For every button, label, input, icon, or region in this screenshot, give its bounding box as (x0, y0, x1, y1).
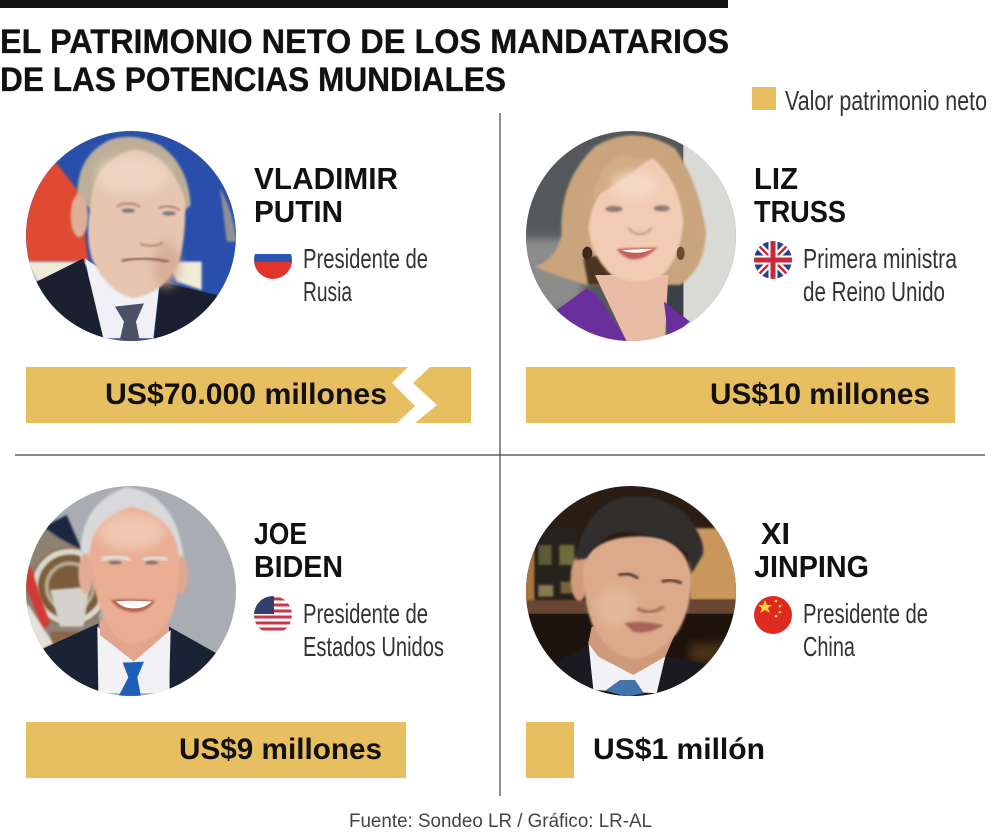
title: EL PATRIMONIO NETO DE LOS MANDATARIOS (0, 23, 729, 61)
portrait: Xi (526, 486, 736, 696)
name (254, 516, 343, 584)
name: LIZ (754, 161, 798, 196)
panel: Joe Biden (20, 480, 444, 778)
name: TRUSS (754, 194, 846, 229)
value bar: US$9 millones (179, 733, 382, 766)
portrait: Biden (26, 486, 236, 696)
name: PUTIN (254, 194, 343, 229)
role: Rusia (303, 276, 352, 307)
value bar: US$70.000 millones (105, 378, 387, 411)
name (754, 161, 846, 229)
role: Presidente de (803, 598, 928, 629)
role (303, 598, 444, 662)
panel: Vladimir Putin (20, 125, 471, 423)
icon: flag of United Kingdom (754, 241, 792, 279)
panel: Xi Jinping (520, 480, 928, 778)
value bar (526, 722, 765, 778)
title (0, 23, 729, 99)
name: BIDEN (254, 549, 343, 584)
value bar (26, 367, 471, 423)
value bar (526, 367, 955, 423)
role: de Reino Unido (803, 276, 945, 307)
name (254, 161, 398, 229)
name: VLADIMIR (254, 161, 398, 196)
value bar: US$10 millones (710, 378, 930, 411)
top rule (0, 0, 728, 8)
role: China (803, 631, 855, 662)
source: Fuente: Sondeo LR / Gráfico: LR-AL (349, 811, 652, 832)
value bar: US$1 millón (593, 733, 765, 766)
role: Estados Unidos (303, 631, 444, 662)
name: JOE (254, 516, 307, 551)
panel: Liz Truss (520, 125, 957, 423)
role (303, 243, 428, 307)
role (803, 243, 957, 307)
name: JINPING (754, 549, 869, 584)
icon: flag of Russia (254, 254, 292, 279)
portrait: Putin (26, 131, 236, 341)
portrait: Truss (526, 131, 736, 341)
name (754, 516, 869, 584)
role (803, 598, 928, 662)
value bar (26, 722, 406, 778)
icon: flag of China (754, 596, 792, 634)
icon: flag of United States (254, 596, 292, 634)
role: Presidente de (303, 243, 428, 274)
name: XI (761, 516, 790, 551)
title: DE LAS POTENCIAS MUNDIALES (0, 61, 506, 99)
role: Presidente de (303, 598, 428, 629)
